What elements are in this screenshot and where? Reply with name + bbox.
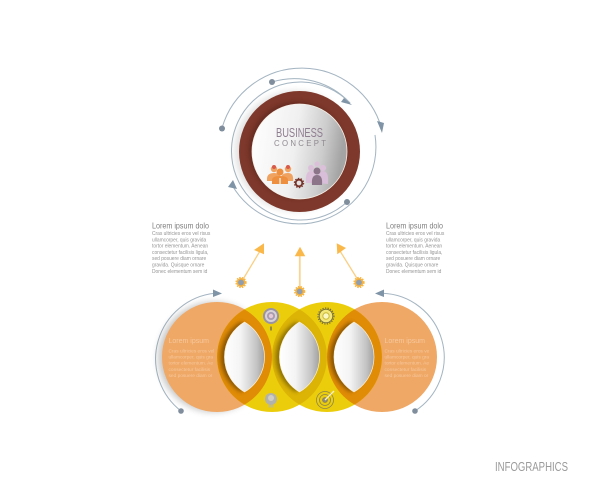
icon: orange people group — [267, 165, 293, 184]
curved arrow: bottom right — [375, 290, 444, 414]
text block: right orange circle: tortor elementum. Ae — [384, 360, 429, 366]
text block: right: tortor elementum. Aenean — [386, 243, 442, 250]
text block: left orange circle: Lorem ipsum — [168, 338, 209, 345]
lens: left overlap — [217, 310, 272, 405]
text block: left orange circle — [168, 338, 214, 379]
text block: left: tortor elementum. Aenean — [152, 243, 208, 250]
text block: left orange circle: consectetur facilisis — [168, 367, 211, 373]
text block: right: consectetur facilisis ligula, — [386, 250, 442, 256]
text block: right orange circle: consectetur facilisis — [384, 367, 427, 373]
lens: right overlap — [327, 310, 382, 405]
icon: purple people group — [306, 162, 328, 185]
text block: right orange circle: sed posuere diam or — [384, 373, 429, 379]
label: infographics: INFOGRAPHICS — [495, 460, 568, 474]
text block: right orange circle — [384, 338, 430, 379]
text block: left orange circle: ullamcorper, quis gra — [168, 354, 213, 360]
text block: left orange circle: tortor elementum. Ae — [168, 360, 213, 366]
title: business concept: CONCEPT — [274, 139, 326, 148]
curved arrow: bottom left — [156, 290, 222, 414]
text block: right: Donec elementum sem id — [386, 269, 441, 275]
circle: yellow left — [217, 302, 327, 412]
text block: left orange circle: sed posuere diam or — [168, 373, 213, 379]
icon: target ring — [263, 308, 279, 330]
text block: right: sed posuere diam ornare — [386, 256, 440, 262]
text block: left: sed posuere diam ornare — [152, 256, 206, 262]
circle: right orange — [327, 302, 437, 412]
text block: left: Donec elementum sem id — [152, 269, 207, 275]
text block: left: ullamcorper, quis gravida — [152, 237, 206, 243]
text block: left: consectetur facilisis ligula, — [152, 250, 208, 256]
text block: left orange circle: Cras ultricies eros vel — [168, 348, 214, 354]
text block: left — [152, 220, 211, 275]
arrow: center — [295, 247, 305, 296]
infographic canvas — [152, 68, 568, 471]
icon: dartboard — [316, 391, 334, 408]
text block: right — [386, 220, 445, 275]
arrow: left — [236, 243, 264, 288]
arrow: right — [337, 243, 364, 288]
text block: left: Cras ultricies eros vel risus — [152, 231, 211, 237]
text block: right: gravida. Quisque ornare — [386, 262, 438, 269]
circle: yellow right — [272, 302, 382, 412]
text block: left: gravida. Quisque ornare — [152, 262, 204, 269]
lens: center overlap — [272, 310, 327, 404]
title: business concept — [274, 126, 326, 148]
circular arrows around hub — [219, 68, 384, 224]
title: business concept: BUSINESS — [276, 126, 323, 140]
text block: right orange circle: Lorem ipsum — [384, 338, 425, 345]
business concept hub — [235, 91, 360, 212]
text block: right: Cras ultricies eros vel risus — [386, 231, 445, 237]
text block: left: Lorem ipsum dolo — [152, 220, 209, 230]
text block: right orange circle: ullamcorper, quis gra — [384, 354, 429, 360]
linked circles chart — [158, 300, 437, 415]
text block: right: ullamcorper, quis gravida — [386, 237, 440, 243]
text block: right orange circle: Cras ultricies eros ve — [384, 348, 430, 354]
icon: cog — [318, 308, 334, 324]
text block: right: Lorem ipsum dolo — [386, 220, 443, 230]
icon: gear — [294, 178, 304, 188]
circle: left orange — [162, 302, 272, 412]
icon: light bulb — [265, 393, 277, 408]
